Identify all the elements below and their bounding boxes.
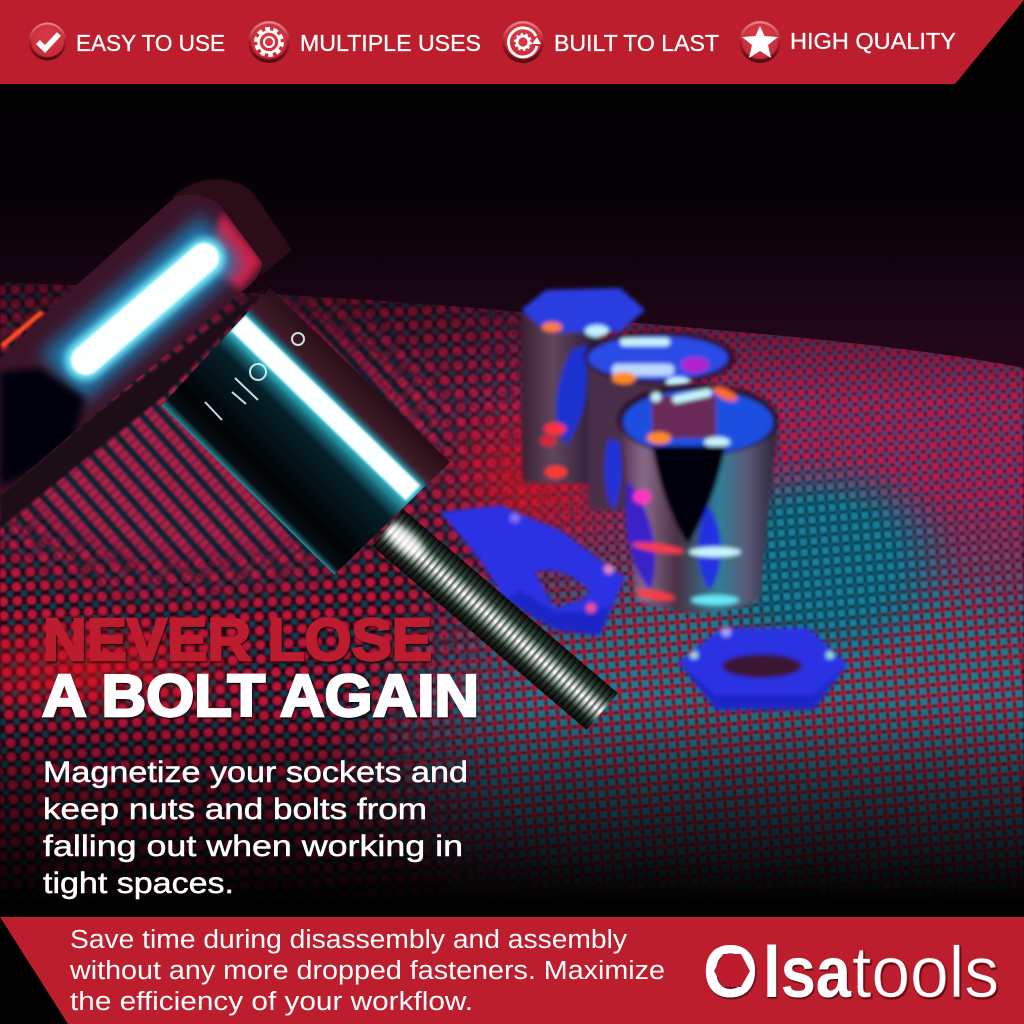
feature: high quality: HIGH QUALITY (790, 28, 956, 54)
icon: gear (248, 21, 290, 63)
photo: middle socket (585, 332, 735, 510)
icon: star (739, 21, 781, 63)
photo: bolt (372, 510, 618, 730)
photo: front socket (618, 384, 778, 612)
logo: Olsatools: O (703, 930, 758, 1013)
body text: tight spaces. (43, 867, 234, 900)
logo: Olsatools: lsa (763, 933, 852, 1013)
photo: blue nut front (678, 627, 848, 710)
heading: a bolt again: A BOLT AGAIN (42, 663, 479, 729)
body text (43, 756, 468, 900)
feature: multiple uses: MULTIPLE USES (300, 30, 481, 56)
icon: check mark (28, 22, 66, 60)
bottom text (69, 926, 665, 1016)
feature: easy to use: EASY TO USE (76, 30, 225, 56)
body text: Magnetize your sockets and (43, 756, 468, 789)
logo: Olsatools: tools (852, 933, 999, 1013)
heading: never lose: NEVER LOSE (43, 607, 432, 673)
icon: cycle gear (502, 21, 544, 63)
photo: blue nut near bolt (440, 505, 625, 636)
photo: textured mat (0, 280, 1024, 930)
feature: built to last: BUILT TO LAST (554, 30, 719, 56)
photo: lower socket (162, 288, 450, 574)
body text: keep nuts and bolts from (43, 793, 427, 826)
bottom text: Save time during disassembly and assembly (70, 926, 627, 954)
logo: Olsatools (703, 930, 999, 1013)
bottom text: the efficiency of your workflow. (70, 988, 473, 1016)
photo: back socket (521, 288, 645, 483)
bottom banner (0, 917, 1024, 1024)
body text: falling out when working in (43, 830, 463, 863)
photo: upper socket (0, 179, 295, 528)
top banner (0, 0, 1024, 84)
bottom text: without any more dropped fasteners. Maximize (69, 957, 665, 985)
